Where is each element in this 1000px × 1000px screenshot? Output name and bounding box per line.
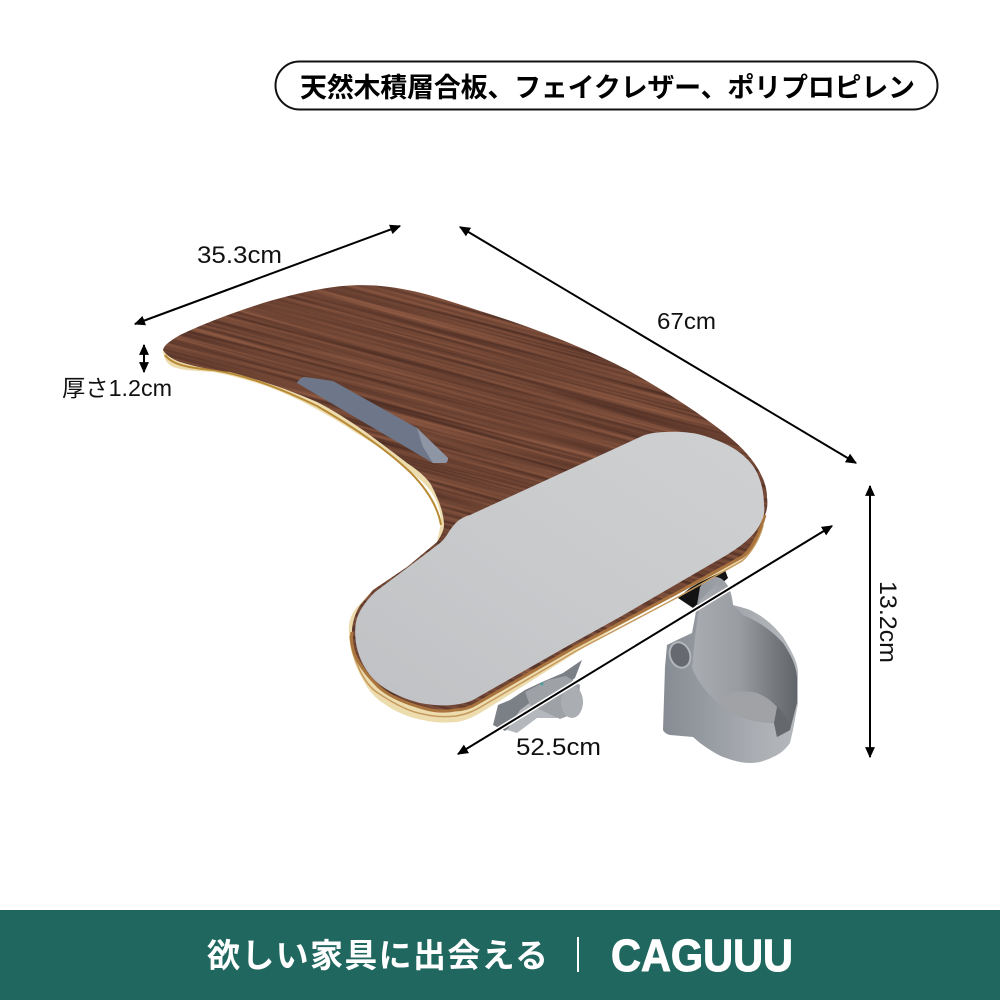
material heading pill <box>276 62 938 110</box>
walnut wood top surface <box>163 285 768 710</box>
plywood edge of board <box>163 350 767 723</box>
product illustration: armrest desk board with cup holder <box>163 285 798 763</box>
dimension: 52.5cm depth: 52.5cm <box>516 734 601 761</box>
material heading pill: 天然木積層合板、フェイクレザー、ポリプロピレン <box>300 73 915 103</box>
dimension: 1.2cm thickness: 厚さ1.2cm <box>62 375 172 401</box>
rear clamp bracket <box>678 570 728 608</box>
footer brand band <box>0 910 1000 1000</box>
wrist support ridge <box>297 377 448 463</box>
grey faux leather mat <box>355 432 764 705</box>
dimension: 1.2cm thickness <box>62 345 172 401</box>
dimension: 67cm length <box>460 227 856 463</box>
dimension: 52.5cm depth <box>458 526 832 761</box>
footer tagline: 欲しい家具に出会える <box>207 937 548 974</box>
dimension: 35.3cm width: 35.3cm <box>197 242 282 269</box>
board rim line <box>352 515 765 711</box>
footer divider <box>577 937 579 972</box>
front clamp and knob <box>493 660 583 733</box>
dimension: 35.3cm width <box>135 226 400 324</box>
dimension: 13.2cm height: 13.2cm <box>874 581 901 663</box>
brand logo wordmark: CAGUUU <box>611 930 793 981</box>
dimension: 67cm length: 67cm <box>657 308 716 334</box>
cup holder <box>663 577 798 763</box>
